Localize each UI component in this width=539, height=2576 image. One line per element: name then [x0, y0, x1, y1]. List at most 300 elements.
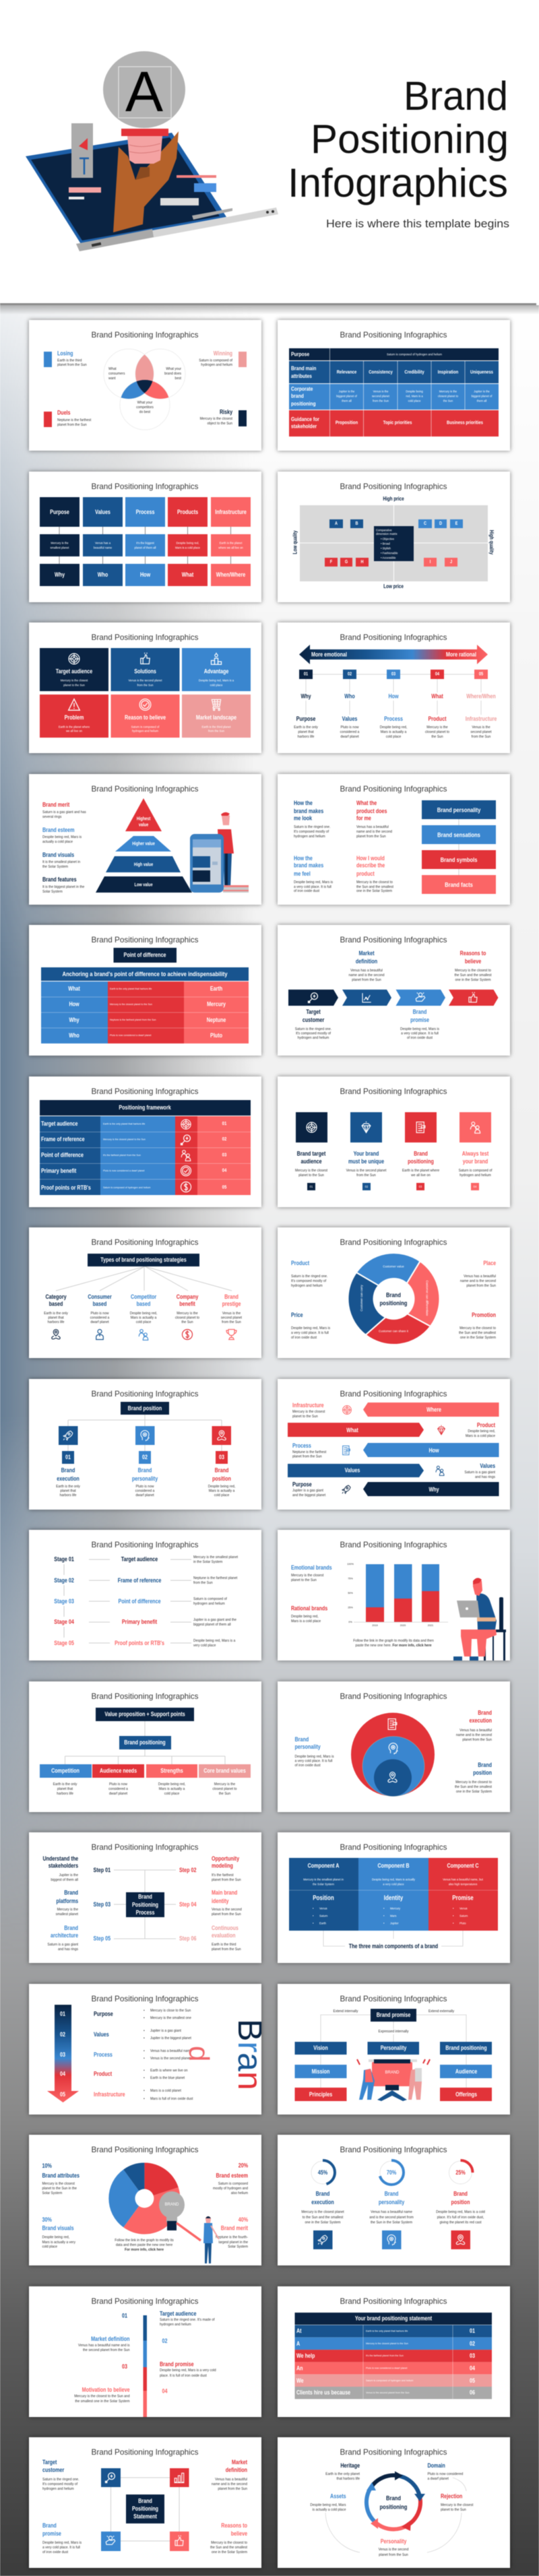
text: target customer: It's composed mostly of: [296, 1032, 331, 1036]
text: brand position: Brand: [478, 1762, 492, 1768]
gradient arrow: 04: [60, 2071, 65, 2077]
text: brand features: Solar System: [42, 889, 63, 893]
text: makes me look: [294, 800, 330, 838]
text: assets: [310, 2493, 346, 2512]
box: brand personality: [422, 800, 496, 819]
table: Brand main: [291, 365, 317, 372]
text: describe the product: describe the: [356, 862, 385, 868]
step 05 where infrastructure: Where/When: [466, 693, 496, 700]
column: brand positioning: Earth is the planet where: [402, 1168, 439, 1172]
title: Brand Positioning Infographics: [340, 784, 447, 794]
illustration: team around screen: [357, 2059, 430, 2100]
grid: red column: Despite being red,: [177, 541, 199, 544]
table: Earth is the only planet that harbors life: [103, 1122, 145, 1125]
table: Credibility: [404, 370, 424, 375]
headings: Process: [94, 2051, 113, 2057]
callout: matrix notes: Comparative: [376, 528, 392, 532]
table: Venus is the: [373, 389, 389, 393]
tile: advantage: [182, 648, 251, 691]
text: brand visuals: Despite being red,: [42, 2235, 69, 2239]
title: Brand Positioning Infographics: [92, 1389, 198, 1398]
text: brand execution: planet from the Sun: [462, 1738, 492, 1742]
text: understand the stakeholders: Jupiter is the: [59, 1873, 78, 1877]
box: brand position: [121, 1401, 169, 1415]
text: brand attributes: 10%: [42, 2163, 53, 2169]
text: emotional brands: Mercury is the closest: [291, 1574, 324, 1578]
statement table: Clients hire us because: [296, 2389, 351, 2395]
column: competitor based: [130, 1293, 157, 1340]
corner: reasons to believe: one in the Solar System: [212, 2550, 247, 2554]
heading: main title: [288, 73, 509, 205]
tile: target audience: [40, 648, 108, 691]
band: what product: Product: [477, 1422, 495, 1428]
panel: stacked bar chart slide: [278, 1530, 510, 1661]
text: brand platforms: Brand: [64, 1890, 78, 1896]
headings: [94, 2011, 125, 2097]
column: core brand values: closest planet to: [212, 1786, 237, 1791]
band: values: Saturn is a gas giant: [464, 1470, 496, 1474]
step 03 how process: cold place: [386, 735, 401, 739]
column: brand execution: 01: [65, 1454, 71, 1460]
ring column: brand position: place. It's full of iron oxide dust,: [437, 2216, 484, 2220]
text: main brand identity: Main brand: [212, 1890, 237, 1896]
statement table: We: [296, 2377, 304, 2383]
box: brand promise: Brand promise: [377, 2011, 411, 2018]
column: core brand values: [199, 1764, 251, 1796]
panel: arrow list slide: [29, 1983, 261, 2114]
text: brand esteem: Brand esteem: [216, 2172, 248, 2179]
text: brand visuals: [42, 851, 80, 869]
statement table: 04: [470, 2364, 475, 2371]
column: category based: planet that: [48, 1316, 64, 1320]
step 02 who values: considered a: [340, 730, 360, 734]
stacked bar chart: 2021: [428, 1624, 433, 1627]
column: brand target audience: 01: [310, 1184, 313, 1188]
center box: statement: Positioning: [132, 2505, 158, 2512]
band: where infrastructure: Infrastructure: [292, 1402, 324, 1408]
column: component C: Promise: [452, 1894, 474, 1902]
text: brand position: [455, 1762, 493, 1793]
ring column: brand personality: Brand: [385, 2191, 398, 2197]
statement table: A: [296, 2340, 300, 2346]
table: [289, 348, 499, 437]
statement table: 03: [470, 2352, 475, 2358]
stacked bar chart: [347, 1563, 448, 1627]
center label: positioning: [380, 1299, 407, 1307]
double arrow: More rational: [446, 651, 476, 658]
statement table: We help: [296, 2352, 315, 2358]
row: stage 02: Neptune is the farthest planet: [193, 1576, 238, 1580]
panel: six tiles slide: [29, 622, 261, 753]
column: component B: Mars: [390, 1914, 396, 1917]
text: opportunity modeling: planet from the Sun: [212, 1878, 241, 1882]
text: rational brands: Despite being red,: [291, 1615, 319, 1619]
band: how process: Process: [292, 1442, 311, 1448]
column: vision mission principles: [295, 2041, 346, 2100]
table: brand: [291, 393, 304, 399]
text: target customer: [295, 1008, 331, 1040]
text: market definition: name and is the second: [348, 973, 385, 977]
title: Brand Positioning Infographics: [92, 1691, 198, 1700]
text: brand architecture: architecture: [51, 1932, 79, 1939]
table: Anchoring a brand's point of difference to achieve indispensability: [62, 971, 228, 977]
text: personality: [379, 2538, 409, 2557]
illustration: bulb and woman: [159, 2191, 219, 2263]
column: brand execution: [56, 1425, 80, 1497]
text: understand the stakeholders: Understand the: [42, 1855, 79, 1862]
panel: positioning framework slide: [29, 1076, 261, 1207]
headings: Infrastructure: [94, 2091, 125, 2097]
bullet list: •: [144, 2036, 145, 2040]
table: Mercury is the closest planet to the Sun: [110, 1003, 152, 1006]
title: Brand Positioning Infographics: [92, 330, 198, 340]
text: main brand identity: [179, 1890, 242, 1917]
column: brand positioning: [402, 1112, 439, 1190]
tile: solutions: Solutions: [134, 668, 156, 675]
box: brand positioning: Brand positioning: [124, 1739, 166, 1745]
text: brand platforms: Mercury is the: [57, 1908, 78, 1912]
ring column: brand execution: 45%: [318, 2169, 328, 2176]
cycle ring: [367, 2471, 425, 2531]
text: brand esteem: Saturn is composed: [218, 2182, 248, 2186]
text: brand architecture: Brand: [64, 1925, 78, 1931]
legend: winning: [199, 350, 247, 367]
text: brand promise: promise: [410, 1017, 429, 1023]
corner: market definition: planet from the Sun: [218, 2487, 247, 2491]
text: brand merit: [216, 2216, 249, 2249]
step 02 who values: Pluto is now: [341, 726, 359, 730]
text: makes me feel: Despite being red, Mars is: [294, 880, 334, 884]
box: point of difference: [113, 948, 177, 963]
column: strengths: Strengths: [160, 1768, 183, 1774]
venn chart: competitors: [136, 406, 154, 410]
column: component A: •: [313, 1914, 314, 1917]
text: brand promise: of iron oxide dust: [407, 1036, 433, 1040]
column: component A: Position: [313, 1894, 334, 1902]
text: product does for me: [356, 800, 392, 838]
table: cold place: [408, 399, 421, 403]
statement table: Earth is the only planet that harbors life: [366, 2329, 408, 2332]
column: your brand must be unique: Your brand: [354, 1151, 379, 1157]
column: brand prestige: prestige: [222, 1301, 241, 1308]
callout: matrix notes: • Broad: [381, 542, 390, 545]
text: rejection: [441, 2493, 474, 2512]
center label: positioning: [380, 2503, 407, 2511]
text: understand the stakeholders: [42, 1855, 111, 1882]
text: promotion: one in the Solar System: [460, 1336, 496, 1340]
box: brand sensations: Brand sensations: [437, 831, 480, 838]
column: component A: Mercury is the smallest planet in: [303, 1878, 344, 1881]
panel: purpose values grid slide: [29, 472, 261, 602]
column: component A: Earth: [319, 1921, 327, 1925]
legend: winning: hydrogen and helium: [201, 363, 232, 367]
divider line: [289, 1890, 498, 1891]
text: price: Price: [291, 1312, 303, 1318]
connector labels: [334, 2009, 455, 2034]
pyramid chart: value: [139, 823, 149, 827]
column: core brand values: the Sun: [219, 1792, 230, 1796]
column: competition: planet that: [57, 1786, 73, 1791]
text: brand personality: Brand: [295, 1736, 309, 1742]
chevron: market definition: [342, 990, 391, 1006]
text: continuous evaluation: [179, 1925, 241, 1952]
text: personality: Personality: [381, 2538, 407, 2545]
column: company benefit: Mercury is the: [177, 1312, 198, 1316]
row: stage 02: from the Sun: [193, 1581, 213, 1585]
row: stage 05: Proof points or RTB's: [115, 1640, 164, 1646]
callout: matrix notes: dimension matrix: [376, 532, 398, 535]
center box: statement: Brand: [138, 2498, 152, 2505]
panel: value proposition tree slide: [29, 1681, 261, 1812]
step 05 where infrastructure: 05: [479, 672, 484, 677]
text: reasons to believe: the Sun and the smallest: [454, 973, 492, 977]
text: brand architecture: Saturn is a gas giant: [47, 1943, 79, 1947]
row: stage 01: Target audience: [121, 1556, 158, 1563]
column: brand positioning: Brand: [414, 1151, 428, 1157]
pyramid chart: Highest: [137, 816, 151, 821]
matrix: [300, 505, 488, 581]
matrix: A: [335, 521, 338, 526]
column: audience needs: [92, 1764, 144, 1796]
row: stage 03: Point of difference: [119, 1598, 161, 1605]
gradient arrow: [47, 2005, 79, 2102]
step 05 where infrastructure: Venus is the: [472, 726, 490, 730]
column: component B: •: [383, 1921, 385, 1925]
text: brand personality: [295, 1736, 334, 1768]
text: promotion: Promotion: [472, 1312, 496, 1318]
text: price: a very cold place. It is full: [291, 1331, 329, 1335]
table: Proof points or RTB's: [41, 1184, 91, 1190]
column: component B: a very cold place: [383, 1882, 404, 1886]
box: personality: [368, 2041, 419, 2055]
column: audience needs: considered a: [108, 1786, 128, 1791]
row: stage 03: hydrogen and helium: [193, 1602, 225, 1606]
column: component C: •: [453, 1906, 454, 1910]
illustration: person on chair with laptop: [453, 1578, 506, 1661]
column: component C: •: [453, 1914, 454, 1917]
corner: target customer: Target: [42, 2459, 57, 2466]
text: brand position: the Sun and the smallest: [455, 1785, 493, 1789]
box: brand facts: Brand facts: [445, 880, 473, 888]
panel: brand pyramid slide: [29, 773, 261, 904]
center box: statement: [126, 2494, 164, 2523]
grid: navy column: smallest planet: [51, 546, 69, 549]
tile: problem: we all live on: [66, 729, 83, 733]
grid: navy column: Purpose: [50, 509, 69, 515]
text: makes me look: Saturn is the ringed one.: [294, 825, 330, 829]
text: promotion: [459, 1312, 497, 1340]
panel: three components slide: [278, 1832, 510, 1963]
column: your brand must be unique: 02: [365, 1184, 369, 1188]
column: brand prestige: from the Sun: [222, 1320, 241, 1324]
corner: reasons to believe: the Sun and the smallest: [210, 2546, 248, 2550]
table: Earth: [210, 986, 222, 992]
band: why purpose: Jupiter is a gas giant: [292, 1489, 323, 1493]
text: makes me feel: of iron oxide dust: [294, 889, 320, 893]
corner: reasons to believe: Reasons to: [221, 2522, 247, 2529]
chart caption: data and then paste the new one here: [116, 2243, 172, 2247]
step 03 how process: [380, 670, 407, 739]
statement table: 05: [470, 2377, 475, 2383]
column: positioning audience offerings: [440, 2041, 492, 2100]
table: Frame of reference: [41, 1136, 85, 1142]
box: brand positioning: [119, 1735, 171, 1749]
column: competition: Earth is the only: [53, 1782, 77, 1786]
grid: mid blue column: How: [140, 571, 151, 577]
band: values: and has rings: [475, 1475, 495, 1479]
tile: solutions: Venus is the second planet: [128, 679, 162, 682]
tile: market landscape: [182, 695, 251, 738]
tile: advantage: cold place: [210, 683, 223, 687]
row: stage 01: Stage 01: [54, 1556, 74, 1563]
text: brand esteem: 20%: [239, 2162, 249, 2169]
grid: red column: Mars is a cold place: [175, 546, 201, 549]
column: brand positioning: we all live on: [411, 1173, 431, 1178]
column: always test your brand: hydrogen and helium: [459, 1173, 491, 1178]
step 02 who values: [336, 670, 363, 739]
column: brand execution: harbors life: [60, 1493, 77, 1497]
text: brand attributes: planet to the Sun in the: [42, 2187, 77, 2191]
heading: main title: Infographics: [288, 160, 508, 205]
outer thin arcs: [325, 2478, 466, 2552]
text: brand personality: personality: [295, 1743, 321, 1749]
text: reasons to believe: [454, 950, 492, 982]
panel: brand cycle slide: [278, 2437, 510, 2568]
column: consumer based: Pluto is now: [91, 1312, 109, 1316]
axis labels: Low quality: [292, 530, 298, 554]
title: Brand Positioning Infographics: [340, 2447, 447, 2457]
gradient arrow: 03: [60, 2051, 65, 2057]
step 01 why purpose: Purpose: [296, 715, 316, 722]
column: category based: harbors life: [48, 1320, 65, 1324]
header: cover hero: [26, 51, 509, 252]
venn chart: What your: [166, 367, 181, 371]
text: describe the product: How I would: [356, 855, 385, 861]
panel: positioning statement table slide: [278, 2286, 510, 2417]
chart caption: For more info, click here: [125, 2248, 164, 2252]
column: component C: also high temperatures: [449, 1882, 477, 1886]
row: stage 01: Mercury is the smallest planet: [193, 1555, 239, 1559]
box: brand promise: [371, 2009, 416, 2021]
row: stage 03: Stage 03: [54, 1598, 74, 1605]
text: makes me look: brand makes: [294, 808, 324, 814]
venn chart: best: [175, 377, 182, 381]
venn chart: brand does: [164, 372, 181, 376]
title: Brand Positioning Infographics: [92, 784, 198, 794]
text: market definition: Venus has a beautiful: [350, 969, 383, 973]
callout: matrix notes: • Stylish: [381, 546, 391, 550]
chart caption: Follow the link in the graph to modify its data and then: [353, 1639, 434, 1643]
tile: problem: [40, 695, 108, 738]
column: brand position: 03: [219, 1454, 224, 1460]
matrix: G: [345, 559, 348, 565]
text: rational brands: [291, 1605, 328, 1623]
text: product does for me: product does: [356, 808, 387, 814]
ring column: brand position: [436, 2160, 485, 2249]
text: continuous evaluation: Step 06: [179, 1935, 197, 1942]
tile: reason to believe: Saturn is composed of: [131, 725, 160, 729]
grid: mid blue column: Process: [136, 509, 155, 515]
wheel labels: Customer can carry: [360, 1285, 363, 1312]
column: brand target audience: audience: [300, 1158, 322, 1164]
text: understand the stakeholders: biggest of them all: [51, 1878, 78, 1882]
bullet list: Venus has a beautiful name: [150, 2049, 192, 2053]
column: brand target audience: Mercury is the closest: [295, 1168, 328, 1172]
table: Mercury is the closest planet to the Sun: [103, 1138, 146, 1140]
legend: risky: object to the Sun: [207, 422, 232, 426]
row: stage 04: Jupiter is a gas giant and the: [193, 1618, 236, 1622]
table: It's the farthest planet from the Sun: [103, 1153, 141, 1156]
panel: brand dimensions text slide: [278, 773, 510, 904]
column: component B: Jupiter: [390, 1921, 399, 1925]
statement table: At: [296, 2327, 302, 2334]
column: brand personality: [132, 1425, 158, 1497]
table: Relevance: [337, 370, 357, 375]
corner: market definition: [170, 2459, 247, 2491]
legend: losing: [44, 350, 87, 367]
row: stage 02: [54, 1576, 238, 1585]
bullet list: Mercury is close to the Sun: [150, 2009, 191, 2013]
text: continuous evaluation: planet from the Sun: [212, 1947, 241, 1952]
text: assets: Despite being red, Mars: [310, 2503, 346, 2507]
grid: navy column: Why: [55, 571, 65, 577]
text: brand promise: Despite being red, Mars is: [400, 1027, 440, 1031]
text: describe the product: one in the Solar System: [356, 889, 392, 893]
item 02: [78, 2336, 168, 2352]
text: target customer: hydrogen and helium: [298, 1036, 329, 1040]
text: makes me feel: brand makes: [294, 862, 324, 868]
table: positioning: [291, 400, 316, 407]
chevron: target customer: [288, 990, 338, 1006]
heading: main title: Positioning: [311, 117, 509, 162]
table: How: [69, 1001, 80, 1008]
title: Brand Positioning Infographics: [92, 1842, 198, 1852]
legend: duels: planet from the Sun: [57, 423, 87, 427]
column: always test your brand: Saturn is composed of: [459, 1168, 493, 1172]
column: brand position: Brand: [215, 1467, 228, 1473]
column: brand target audience: planet to the Sun: [298, 1173, 324, 1178]
connector labels: Extend externally: [429, 2009, 455, 2013]
table: Consistency: [369, 370, 393, 375]
statement table: Your brand positioning statement: [355, 2315, 432, 2321]
text: brand merit: Brand merit: [42, 802, 70, 808]
table: Earth is the only planet that harbors life: [110, 988, 152, 990]
item 03: 03: [122, 2363, 127, 2369]
ring column: brand personality: 70%: [387, 2169, 397, 2176]
text: makes me feel: me feel: [294, 870, 311, 876]
center box: process: Brand: [138, 1894, 152, 1900]
title: Brand Positioning Infographics: [340, 2145, 447, 2154]
center box: statement: Statement: [133, 2513, 157, 2520]
column: competition: Competition: [51, 1768, 80, 1774]
square connector: [110, 2478, 179, 2541]
axis labels: Low price: [383, 583, 404, 589]
callout: matrix notes: • Accessible: [381, 556, 396, 559]
item 02: the second planet from the Sun: [83, 2348, 130, 2352]
column: brand execution: Earth is the only: [56, 1485, 80, 1489]
text: brand visuals: Brand visuals: [42, 851, 74, 858]
illustration: laptop with hand holding a bulb: [26, 51, 278, 251]
title: Brand Positioning Infographics: [92, 633, 198, 642]
matrix: E: [455, 521, 457, 526]
item 01: hydrogen and helium: [160, 2323, 191, 2327]
title: Brand Positioning Infographics: [340, 633, 447, 642]
timeline connector: [306, 674, 481, 720]
panel: positioning strategies slide: [29, 1227, 261, 1358]
step 03 how process: Process: [384, 715, 403, 722]
text: continuous evaluation: evaluation: [212, 1932, 236, 1939]
column: brand prestige: [221, 1293, 243, 1339]
